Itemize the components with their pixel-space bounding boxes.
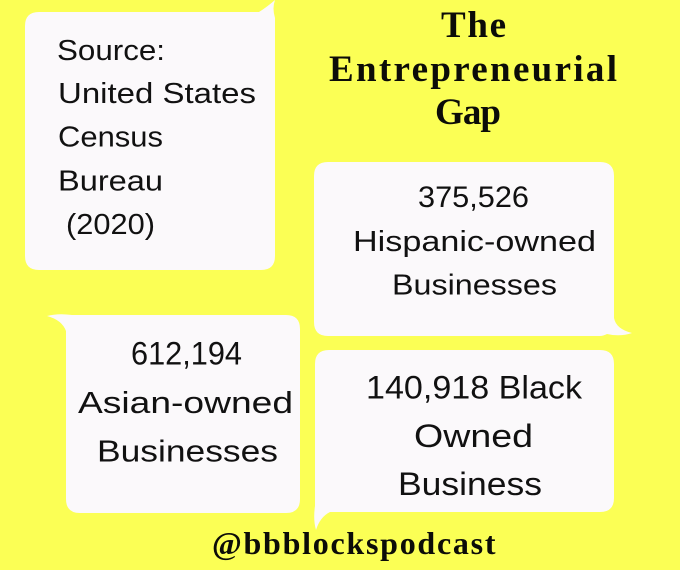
panel: Black-owned business bubble: Owned: [414, 418, 533, 454]
panel: Hispanic-owned businesses bubble: Hispanic-owned: [353, 226, 596, 258]
panel: Asian-owned businesses bubble: 612,194: [131, 336, 242, 372]
panel: source speech bubble: (2020): [66, 209, 155, 241]
panel: Black-owned business bubble: Business: [398, 466, 542, 502]
panel: source speech bubble: Bureau: [58, 166, 163, 198]
panel: Hispanic-owned businesses bubble: [314, 162, 632, 336]
title: [329, 5, 617, 133]
panel: Hispanic-owned businesses bubble: Businesses: [392, 270, 557, 302]
panel: Asian-owned businesses bubble: [47, 314, 300, 513]
panel: Asian-owned businesses bubble: Businesses: [97, 434, 278, 468]
panel: source speech bubble: Source:: [57, 35, 165, 67]
panel: Black-owned business bubble: [314, 350, 614, 530]
panel: source speech bubble: [25, 0, 275, 270]
panel: Hispanic-owned businesses bubble: 375,526: [418, 181, 529, 214]
panel: Black-owned business bubble: 140,918 Black: [366, 370, 583, 406]
panel: source speech bubble: Census: [58, 122, 163, 154]
panel: Asian-owned businesses bubble: Asian-owned: [78, 385, 293, 420]
title: The: [441, 5, 506, 46]
footer handle: @bbblockspodcast: [212, 525, 496, 561]
title: Gap: [435, 92, 501, 133]
title: Entrepreneurial: [329, 49, 617, 90]
panel: source speech bubble: United States: [58, 78, 256, 110]
